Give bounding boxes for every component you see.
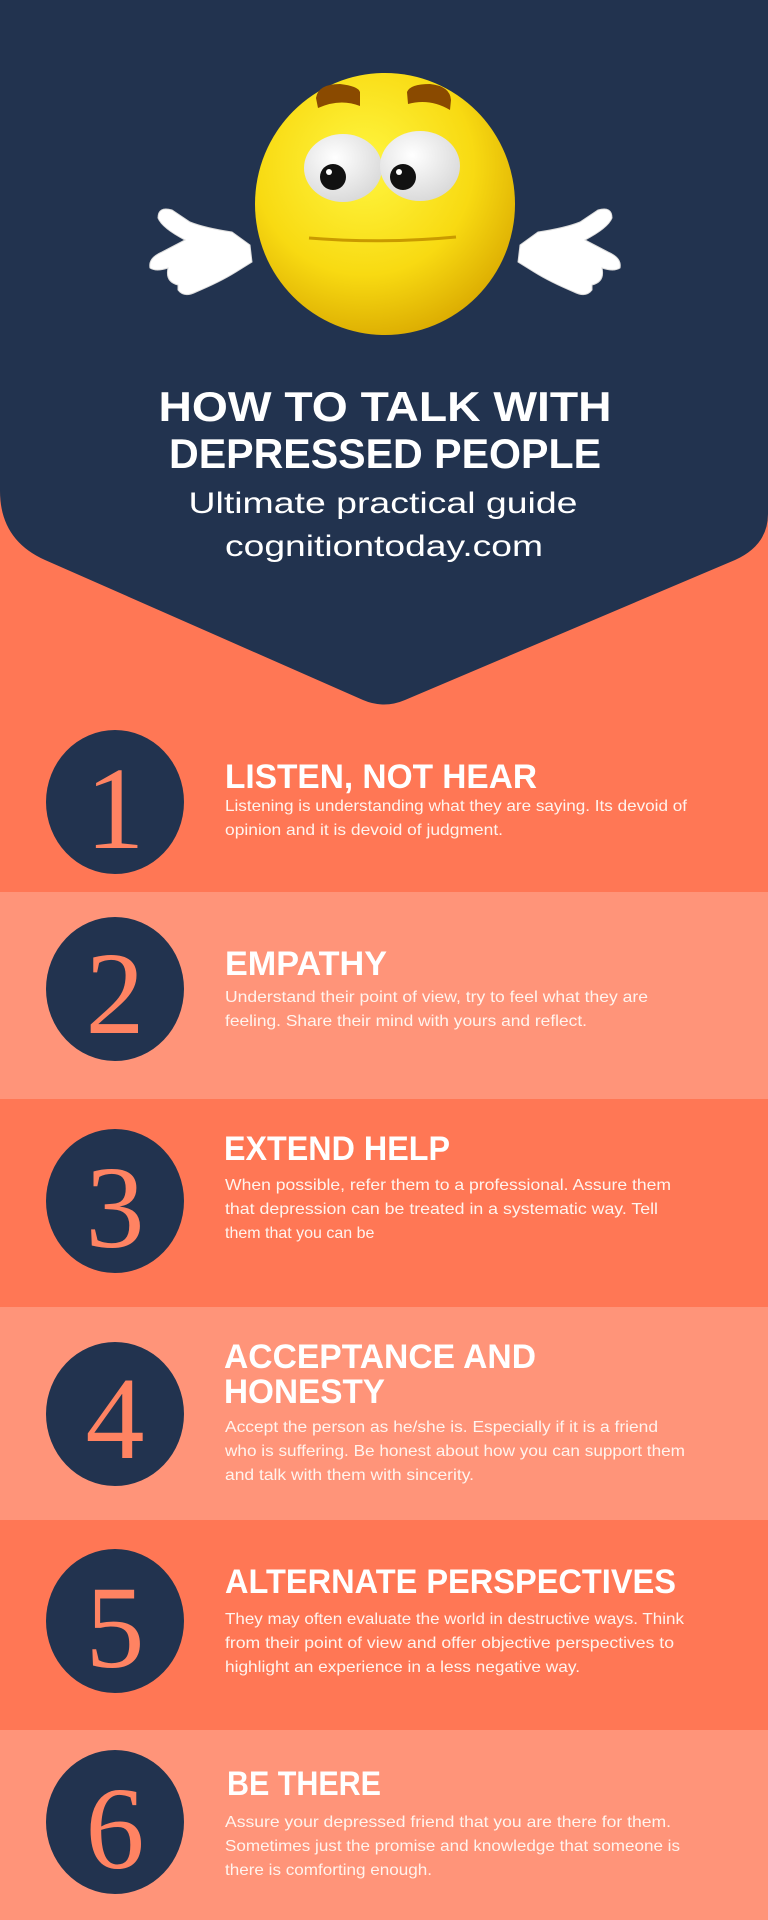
right hand	[518, 209, 620, 295]
band 6 background	[0, 1730, 768, 1920]
heading 4: ACCEPTANCE AND	[224, 1338, 536, 1376]
body 4: Accept the person as he/she is. Especially if it is a friend	[225, 1419, 658, 1436]
left hand	[150, 209, 252, 295]
face	[255, 73, 515, 335]
heading 4: HONESTY	[224, 1373, 385, 1411]
eyebrows	[316, 84, 360, 108]
number circle 5: 5	[86, 1562, 144, 1693]
heading 5: ALTERNATE PERSPECTIVES	[225, 1563, 676, 1601]
mouth	[309, 237, 456, 241]
subtitle: cognitiontoday.com	[225, 530, 543, 563]
band 4 background	[0, 1307, 768, 1520]
body 5: highlight an experience in a less negative way.	[225, 1659, 580, 1676]
item 3: extend help	[46, 1129, 671, 1273]
number circle 2: 2	[86, 928, 144, 1059]
body 3: them that you can be	[225, 1225, 375, 1242]
item 6: be there	[46, 1750, 680, 1894]
number circle 1	[46, 730, 184, 874]
heading 4	[224, 1338, 536, 1411]
number circle 1: 1	[86, 743, 144, 874]
body 6: Assure your depressed friend that you are there for them.	[225, 1814, 671, 1831]
body 4: who is suffering. Be honest about how you can support them	[224, 1443, 685, 1460]
number circle 2	[46, 917, 184, 1061]
body 5: They may often evaluate the world in destructive ways. Think	[225, 1611, 685, 1628]
item 4: acceptance and honesty	[46, 1338, 685, 1486]
body 2: feeling. Share their mind with yours and reflect.	[225, 1013, 587, 1030]
body 5: from their point of view and offer objective perspectives to	[225, 1635, 674, 1652]
eyes	[304, 134, 382, 202]
body 6: there is comforting enough.	[225, 1862, 432, 1879]
body 6	[225, 1814, 680, 1879]
number circle 3	[46, 1129, 184, 1273]
body 3: that depression can be treated in a systematic way. Tell	[225, 1201, 658, 1218]
heading 6: BE THERE	[227, 1765, 381, 1803]
body 3: When possible, refer them to a professional. Assure them	[225, 1177, 671, 1194]
body 4: and talk with them with sincerity.	[225, 1467, 474, 1484]
heading 2: EMPATHY	[225, 945, 387, 983]
item 1: listen, not hear	[46, 730, 688, 874]
heading 3: EXTEND HELP	[224, 1130, 450, 1168]
heading 1: LISTEN, NOT HEAR	[225, 758, 537, 796]
band 1 background	[0, 0, 768, 892]
number circle 6: 6	[86, 1763, 144, 1894]
body 6: Sometimes just the promise and knowledge that someone is	[225, 1838, 680, 1855]
number circle 4	[46, 1342, 184, 1486]
body 4	[224, 1419, 685, 1484]
body 5	[225, 1611, 685, 1676]
subtitle: Ultimate practical guide	[188, 487, 578, 520]
band 3 background	[0, 1099, 768, 1307]
icon: shrugging emoji	[150, 73, 620, 335]
body 1	[225, 798, 688, 839]
body 1: Listening is understanding what they are saying. Its devoid of	[225, 798, 688, 815]
item 2: empathy	[46, 917, 648, 1061]
band 5 background	[0, 1520, 768, 1730]
title	[158, 383, 612, 477]
number circle 6	[46, 1750, 184, 1894]
number circle 4: 4	[86, 1353, 144, 1484]
body 1: opinion and it is devoid of judgment.	[225, 822, 503, 839]
band 2 background	[0, 892, 768, 1099]
title: HOW TO TALK WITH	[158, 383, 612, 430]
body 2	[225, 989, 648, 1030]
number circle 5	[46, 1549, 184, 1693]
title: DEPRESSED PEOPLE	[169, 430, 601, 477]
item 5: alternate perspectives	[46, 1549, 685, 1693]
body 2: Understand their point of view, try to feel what they are	[225, 989, 648, 1006]
number circle 3: 3	[86, 1142, 144, 1273]
subtitle	[188, 487, 578, 563]
body 3	[225, 1177, 671, 1242]
header navy shield shape	[0, 0, 768, 704]
